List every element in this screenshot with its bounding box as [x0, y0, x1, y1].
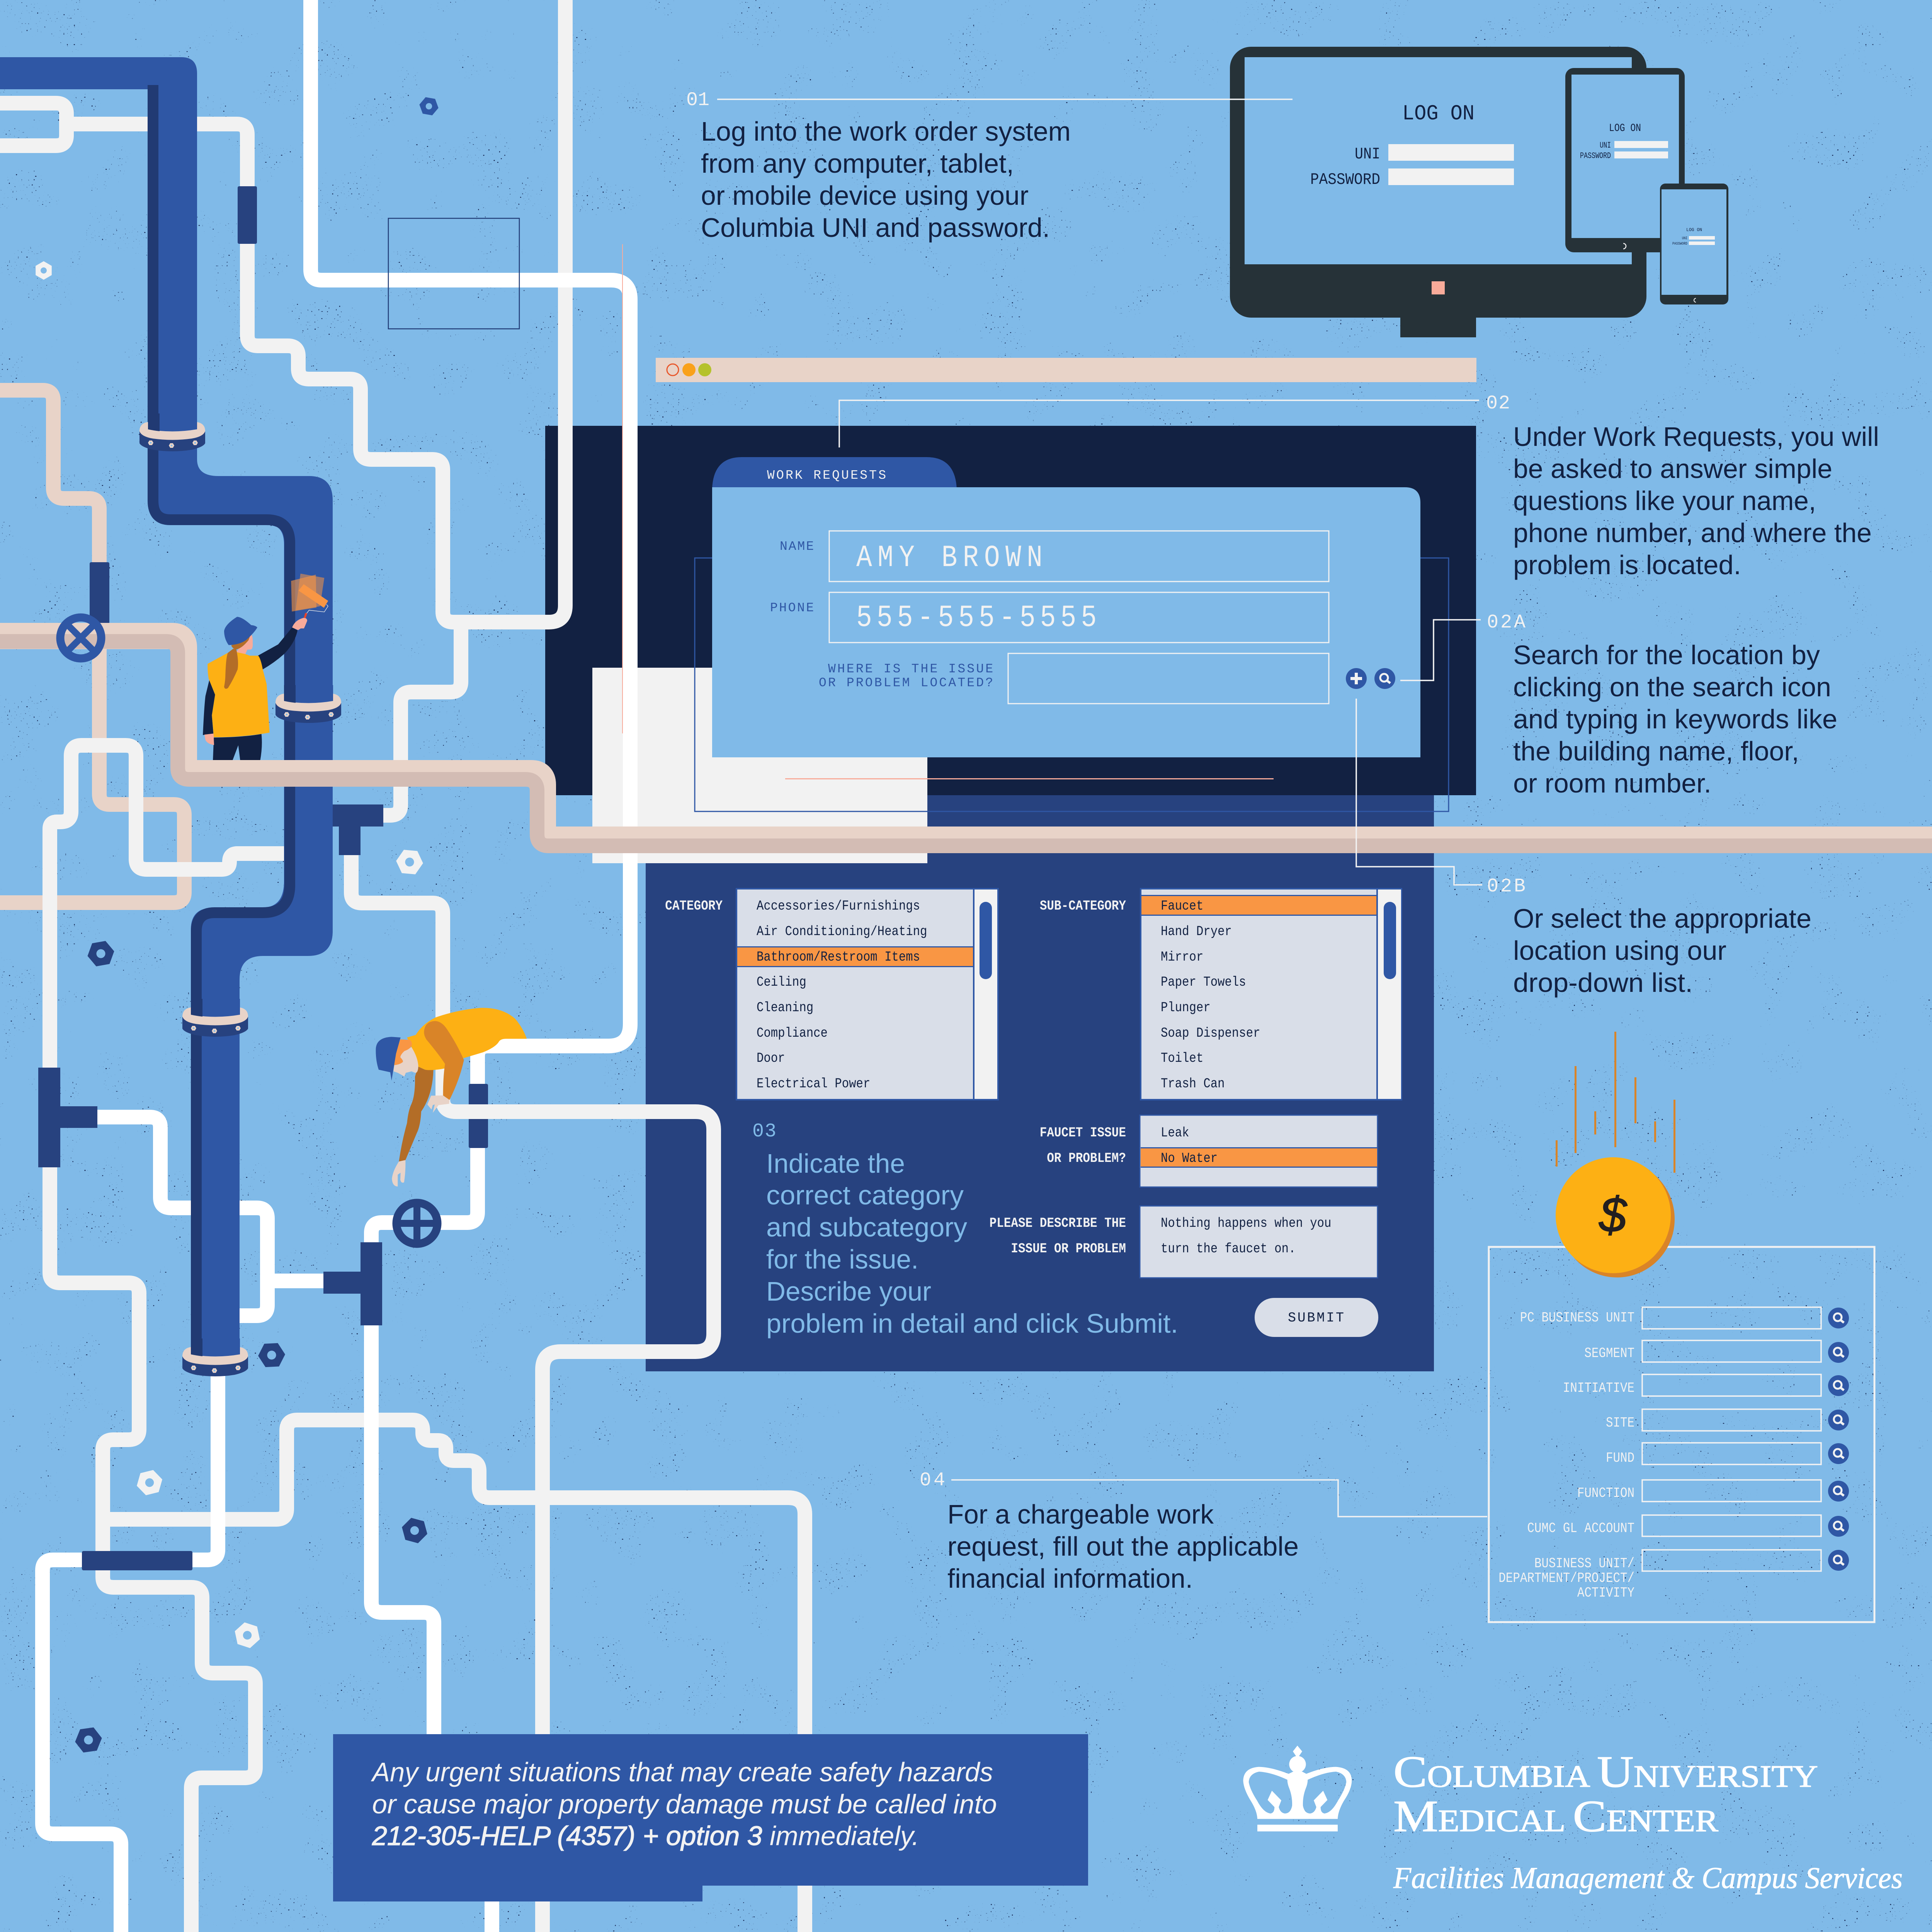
location label line 2: OR PROBLEM LOCATED? — [819, 676, 993, 690]
step 02 text: Under Work Requests, you will — [1513, 422, 1879, 452]
financial fields — [1642, 1307, 1821, 1571]
device: phone: PASSWORD — [1672, 242, 1687, 246]
search icon — [1374, 668, 1395, 689]
device: tablet — [1565, 68, 1685, 252]
falling coin motion lines — [1556, 1032, 1675, 1173]
nut white centre — [395, 849, 424, 875]
step 02A text: or room number. — [1513, 768, 1711, 798]
pipe collar 1 — [139, 413, 205, 451]
connector sleeve upper — [238, 186, 257, 244]
financial labels: SITE — [1606, 1415, 1634, 1431]
step 02A text: Search for the location by — [1513, 640, 1820, 670]
step 03 form: faucet issue list: FAUCET ISSUE — [1040, 1125, 1126, 1141]
step 03 form: category list: Accessories/Furnishings — [757, 898, 920, 914]
financial labels: BUSINESS UNIT/ — [1534, 1556, 1634, 1572]
step 03 text: problem in detail and click Submit. — [766, 1308, 1178, 1338]
browser bar — [656, 358, 1476, 382]
step 03 form: faucet issue list: OR PROBLEM? — [1047, 1150, 1126, 1166]
step 03 form: category list: Bathroom/Restroom Items — [757, 949, 920, 965]
nut navy left — [85, 940, 116, 968]
panel: white offset block — [592, 668, 927, 863]
nut white left — [32, 259, 56, 282]
step 02B text: drop-down list. — [1513, 968, 1693, 998]
step 02 text: be asked to answer simple — [1513, 454, 1832, 484]
urgent notice box: 212-305-HELP (4357) + option 3 immediately. — [372, 1821, 919, 1851]
device: desktop monitor — [1230, 47, 1646, 337]
valve: cross handle on beige pipe — [60, 617, 101, 658]
submit button: SUBMIT — [1288, 1310, 1344, 1326]
T fitting upper — [333, 804, 383, 855]
decorative outlined square — [388, 218, 519, 329]
coin: $ — [1599, 1187, 1628, 1243]
pipes: white network — [43, 0, 630, 1932]
step 02B text: location using our — [1513, 935, 1726, 966]
step 01 number: 01 — [686, 89, 709, 111]
connector sleeve left — [90, 562, 109, 624]
location field — [1008, 653, 1329, 704]
step 03 form: faucet issue list: No Water — [1161, 1151, 1218, 1166]
grey pipe passing over right sleeve — [466, 1104, 493, 1119]
logo: Columbia crown — [1243, 1746, 1352, 1832]
salmon accent line — [785, 778, 1274, 779]
worker leaning over the pipe — [376, 1008, 527, 1187]
step 04 text — [947, 1499, 1299, 1594]
nut navy by collar — [257, 1343, 286, 1367]
location label line 1: WHERE IS THE ISSUE — [828, 662, 993, 676]
step 02A text: and typing in keywords like — [1513, 704, 1837, 734]
financial labels: PC BUSINESS UNIT — [1520, 1310, 1634, 1326]
step 03 form: sub-category list: Paper Towels — [1161, 975, 1246, 990]
pipe collar 3 — [182, 999, 248, 1037]
device: tablet: UNI — [1600, 141, 1611, 150]
step 03 text — [766, 1148, 1178, 1338]
step 03 form: category list: Ceiling — [757, 975, 806, 990]
step 02A text: the building name, floor, — [1513, 736, 1799, 766]
step 01 text: Columbia UNI and password. — [701, 213, 1050, 243]
step 02A number: 02A — [1487, 612, 1526, 634]
device: phone — [1660, 184, 1728, 304]
financial labels — [1498, 1310, 1634, 1601]
step 03 form: faucet issue list: Leak — [1161, 1125, 1189, 1141]
device: phone: LOG ON — [1686, 227, 1702, 233]
step 03 form: category list: Door — [757, 1051, 785, 1066]
step 03 text: and subcategory — [766, 1212, 967, 1242]
step 03 form: description box: PLEASE DESCRIBE THE — [990, 1215, 1126, 1231]
connector 01 — [717, 99, 1293, 100]
device: desktop monitor: UNI — [1355, 145, 1380, 163]
nut navy lower — [399, 1516, 430, 1545]
main trunk pipe — [0, 57, 333, 1356]
step 04 number: 04 — [920, 1469, 945, 1492]
step 01 text: from any computer, tablet, — [701, 148, 1014, 179]
device: desktop monitor: LOG ON — [1402, 101, 1475, 126]
connector sleeve horizontal — [82, 1551, 192, 1570]
card tab — [712, 457, 957, 489]
connector 04 — [951, 1480, 1487, 1517]
pipes: thin beige — [0, 390, 184, 903]
step 02B number: 02B — [1487, 876, 1526, 898]
financial labels: FUND — [1606, 1451, 1634, 1466]
worker painting the pipe — [203, 573, 328, 760]
nut blue top — [418, 96, 440, 116]
step 04 text: financial information. — [947, 1563, 1193, 1594]
urgent notice box — [333, 1734, 1088, 1901]
step 02 text: phone number, and where the — [1513, 518, 1872, 548]
step 03 form: sub-category list: Toilet — [1161, 1051, 1203, 1066]
step 03 form: sub-category list: Hand Dryer — [1161, 924, 1232, 939]
financial labels: DEPARTMENT/PROJECT/ — [1498, 1571, 1634, 1587]
step 02B text: Or select the appropriate — [1513, 903, 1811, 934]
device: tablet: PASSWORD — [1580, 151, 1611, 161]
step 01 text: Log into the work order system — [701, 116, 1071, 146]
valve: plus handle on white pipe — [395, 1202, 439, 1245]
nut white lower — [134, 1468, 165, 1497]
step 03 form: sub-category list: Mirror — [1161, 949, 1203, 965]
T fitting left — [38, 1068, 97, 1167]
step 03 number: 03 — [752, 1121, 776, 1143]
T fitting lower — [323, 1242, 382, 1325]
device: desktop monitor: PASSWORD — [1310, 170, 1380, 189]
financial labels: ACTIVITY — [1577, 1585, 1634, 1601]
step 03 form: faucet issue list — [1040, 1115, 1378, 1187]
step 03 form: sub-category list: Faucet — [1161, 898, 1203, 914]
step 02 text — [1513, 422, 1879, 580]
outline frame — [695, 558, 1449, 811]
urgent notice box: or cause major property damage must be called into — [372, 1789, 997, 1819]
name field — [829, 531, 1329, 582]
large beige pipe — [0, 636, 1932, 846]
phone label: PHONE — [770, 601, 814, 615]
step 04 text: For a chargeable work — [947, 1499, 1214, 1529]
nut white bottom — [231, 1620, 263, 1650]
step 02 text: problem is located. — [1513, 550, 1741, 580]
step 03 form: category list: Cleaning — [757, 1000, 813, 1015]
coin — [1556, 1157, 1675, 1277]
financial labels: CUMC GL ACCOUNT — [1527, 1521, 1634, 1537]
step 03 form: sub-category list — [1040, 888, 1402, 1100]
name value: AMY BROWN — [856, 541, 1043, 576]
nut navy bottom — [73, 1726, 104, 1753]
step 03 form: category list — [665, 888, 999, 1100]
step 03 form: category list: Electrical Power — [757, 1076, 870, 1092]
financial labels: INITIATIVE — [1563, 1381, 1634, 1396]
financial search icons — [1828, 1308, 1849, 1571]
panel: step 03 form background — [646, 795, 1434, 1371]
connector sleeve right — [469, 1084, 488, 1148]
step 03 form: description box: Nothing happens when you — [1161, 1216, 1331, 1231]
logo department line: Facilities Management & Campus Services — [1393, 1861, 1903, 1895]
tab label: WORK REQUESTS — [767, 468, 886, 483]
submit button — [1255, 1298, 1378, 1337]
step 03 text: Describe your — [766, 1276, 931, 1306]
step 01 text: or mobile device using your — [701, 180, 1029, 211]
add icon — [1346, 668, 1367, 689]
step 02B text — [1513, 903, 1811, 998]
step 03 form: sub-category list: Plunger — [1161, 1000, 1211, 1015]
step 03 form: sub-category list: Trash Can — [1161, 1076, 1225, 1092]
step 02 number: 02 — [1486, 393, 1510, 415]
pipe collar 4 — [182, 1338, 248, 1376]
pipe collar 2 — [276, 685, 341, 723]
connector 02B — [1356, 699, 1482, 885]
step 03 form: description box — [990, 1206, 1378, 1278]
panel: work requests card — [712, 457, 1420, 757]
financial form frame — [1489, 1247, 1874, 1622]
logo text line 1: COLUMBIA UNIVERSITY — [1393, 1747, 1818, 1797]
financial labels: SEGMENT — [1584, 1346, 1634, 1362]
connector 02 — [839, 400, 1479, 447]
step 02 text: questions like your name, — [1513, 486, 1816, 516]
step 03 text: Indicate the — [766, 1148, 905, 1179]
logo text line 2: MEDICAL CENTER — [1393, 1792, 1719, 1841]
panel: navy backdrop — [545, 426, 1476, 795]
step 03 form: category list: Air Conditioning/Heating — [757, 924, 927, 939]
device: tablet: LOG ON — [1609, 122, 1641, 134]
urgent notice box: Any urgent situations that may create safety hazards — [371, 1757, 993, 1787]
sub-category label: SUB-CATEGORY — [1040, 898, 1126, 914]
step 02A text — [1513, 640, 1837, 798]
step 01 text — [701, 116, 1071, 243]
financial labels: FUNCTION — [1577, 1486, 1634, 1502]
step 03 form: description box: ISSUE OR PROBLEM — [1011, 1241, 1126, 1257]
name label: NAME — [780, 539, 814, 554]
phone value: 555-555-5555 — [856, 600, 1097, 636]
step 03 text: for the issue. — [766, 1244, 918, 1274]
connector 02A — [1400, 620, 1481, 680]
step 03 form: category list: Compliance — [757, 1026, 828, 1041]
step 02A text: clicking on the search icon — [1513, 672, 1831, 702]
step 03 form: description box: turn the faucet on. — [1161, 1241, 1296, 1257]
category label: CATEGORY — [665, 898, 723, 914]
step 03 text: correct category — [766, 1180, 964, 1210]
device: phone: UNI — [1682, 236, 1687, 241]
card body — [712, 487, 1420, 757]
step 03 form: sub-category list: Soap Dispenser — [1161, 1026, 1260, 1041]
step 04 text: request, fill out the applicable — [947, 1531, 1299, 1561]
thin salmon vertical line — [622, 244, 623, 733]
pipes: light grey network — [0, 0, 805, 1932]
phone field — [829, 592, 1329, 643]
